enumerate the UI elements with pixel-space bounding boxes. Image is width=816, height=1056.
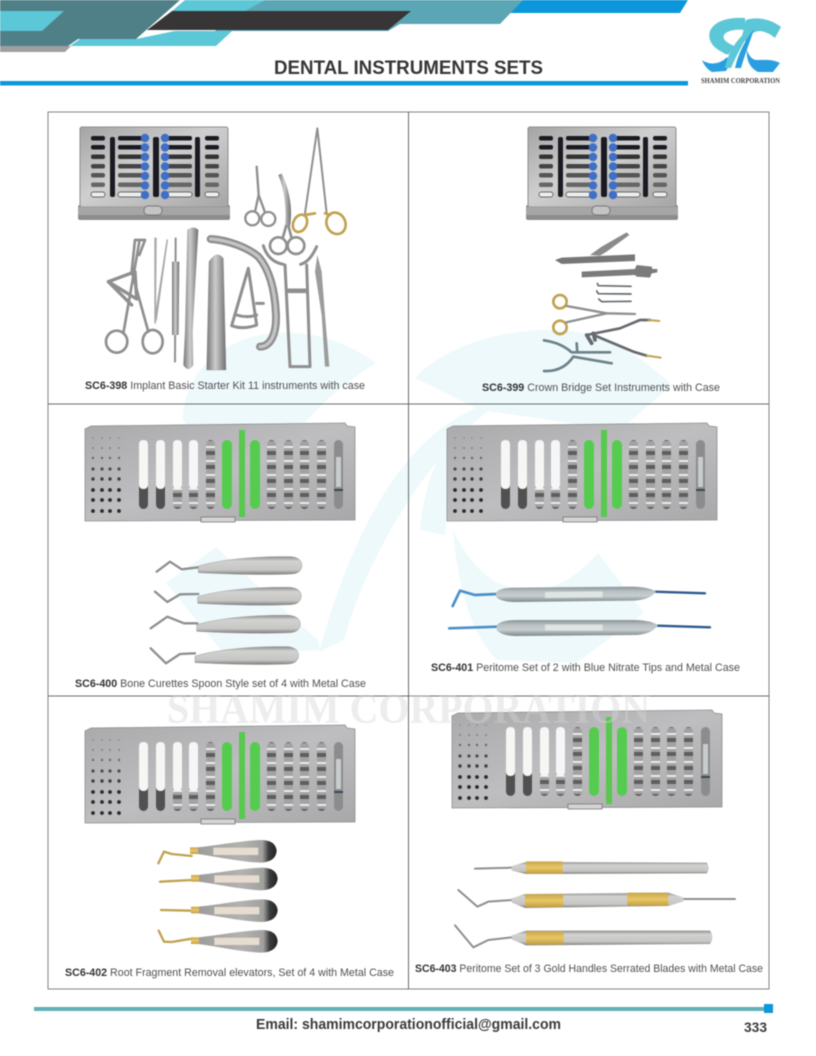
title: DENTAL INSTRUMENTS SETS [274,58,543,79]
header rule [0,81,688,86]
instruments: elevators [158,840,278,953]
instrument case [447,423,717,522]
instrument case [526,127,678,220]
footer rule [34,1004,773,1013]
instruments: blue peritomes [449,587,710,636]
watermark: pale SC logo [166,330,672,663]
caption: SC6-400 Bone Curettes Spoon Style set of 4 with Metal Case [75,678,366,690]
caption: SC6-403 Peritome Set of 3 Gold Handles Serrated Blades with Metal Case [415,963,763,975]
panel: SC6-399 crown bridge set [408,112,769,404]
instruments: curettes [151,557,302,665]
caption: SC6-399 Crown Bridge Set Instruments with Case [482,382,720,394]
page number: 333 [744,1020,767,1035]
panel: SC6-403 gold handle peritomes [408,696,769,989]
panel: SC6-402 root fragment elevators [48,696,408,989]
logo wordmark: SHAMIM CORPORATION [701,77,780,85]
instrument case [85,725,355,824]
caption: SC6-398 Implant Basic Starter Kit 11 instruments with case [85,380,365,392]
watermark: company name: SHAMIM CORPORATION [167,687,650,733]
footer email: Email: shamimcorporationofficial@gmail.com [256,1017,561,1033]
instruments: crown bridge [544,232,661,371]
instruments: implant kit [106,128,349,370]
caption: SC6-402 Root Fragment Removal elevators, Set of 4 with Metal Case [65,967,394,979]
caption: SC6-401 Peritome Set of 2 with Blue Nitrate Tips and Metal Case [431,662,740,674]
header banner [0,0,688,52]
instrument case [78,127,230,220]
instruments: gold peritomes [455,861,735,947]
panel: SC6-401 peritome set of 2 [408,404,769,696]
panel: SC6-398 implant kit [48,112,408,404]
instrument case [85,423,355,522]
logo: Shamim Corporation [701,18,781,85]
panel: SC6-400 bone curettes [48,404,408,696]
instrument case [452,710,722,809]
